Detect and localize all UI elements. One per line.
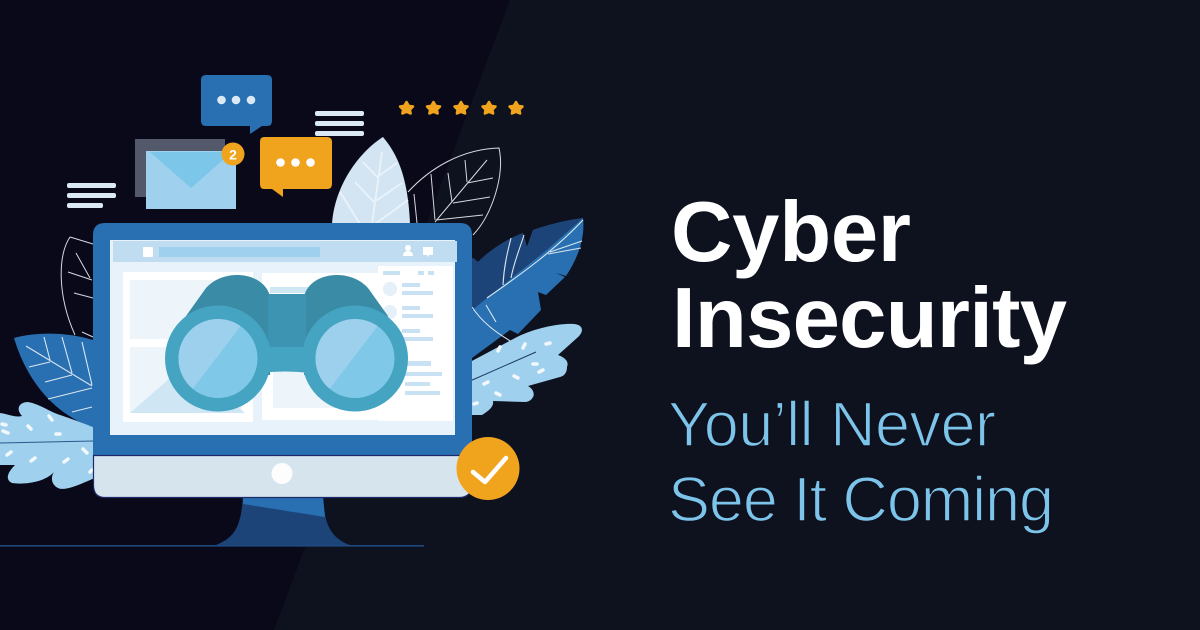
subtitle (668, 390, 1054, 535)
lens left (178, 319, 258, 398)
lens right (316, 319, 394, 398)
leaf: dark blue right (470, 218, 583, 358)
subtitle: See It Coming (668, 465, 1054, 535)
text lines left (67, 183, 116, 208)
envelope (135, 139, 244, 209)
leaf: light blue right (470, 324, 582, 415)
text lines right (315, 111, 364, 136)
monitor stand (216, 496, 350, 545)
badge: count: 2 (229, 146, 237, 162)
speech bubble: orange (260, 137, 332, 197)
leaf: outline left (61, 237, 93, 337)
check badge (456, 437, 520, 500)
title (671, 185, 1067, 366)
leaf: dark blue left (14, 334, 100, 428)
subtitle: You’ll Never (668, 390, 996, 460)
rating stars (400, 102, 522, 114)
monitor chin (94, 456, 472, 498)
monitor (93, 223, 472, 498)
leaf: light blue left (0, 402, 95, 489)
title: Cyber (671, 185, 911, 280)
leaf: pale top (332, 137, 410, 224)
title: Insecurity (672, 271, 1067, 366)
icon: user (403, 245, 413, 256)
leaf: outline top right (408, 148, 500, 235)
speech bubble: blue (201, 75, 272, 134)
binoculars (165, 275, 408, 412)
base line (0, 545, 424, 547)
icon: chat (423, 247, 433, 257)
browser screen (110, 240, 457, 435)
